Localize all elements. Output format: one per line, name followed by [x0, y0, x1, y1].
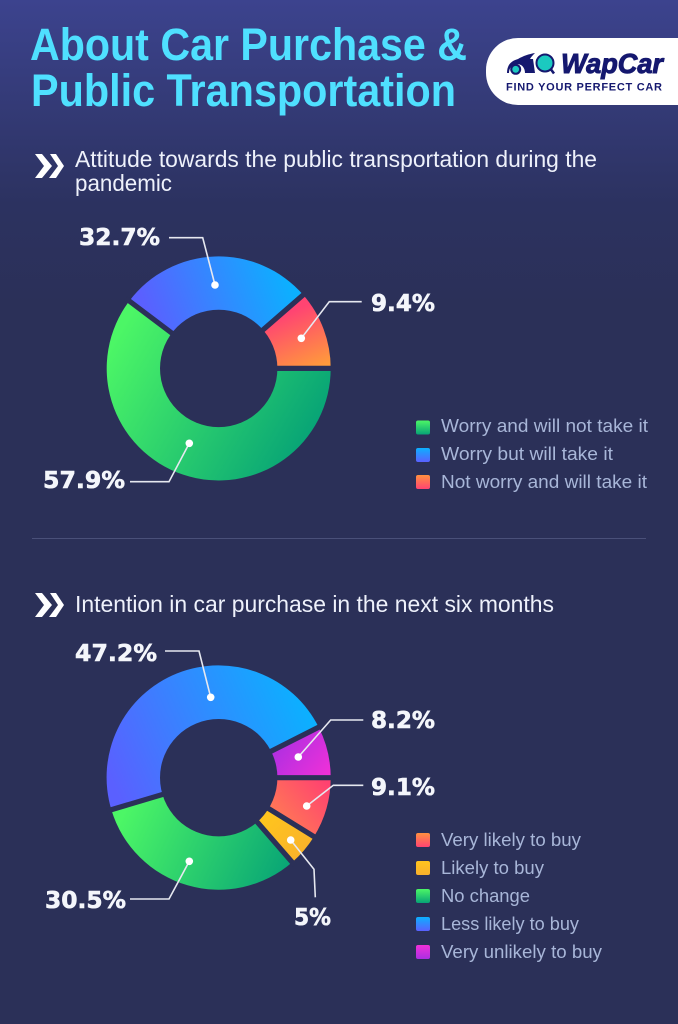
legend: intention: Less likely to buy — [441, 913, 580, 934]
logo badge — [486, 38, 678, 105]
callout: 47.2%: 47.2% — [75, 641, 157, 667]
icon: double chevron — [35, 154, 64, 178]
callout: 9.4% — [298, 291, 435, 342]
callout: 8.2%: 8.2% — [371, 708, 435, 734]
icon: double chevron — [35, 593, 64, 617]
legend: intention — [416, 829, 603, 962]
callout: 8.2% — [294, 708, 435, 761]
logo badge: FIND YOUR PERFECT CAR — [506, 82, 662, 94]
donut chart: intention — [107, 665, 336, 890]
legend: attitude: Worry and will not take it — [441, 415, 648, 436]
heading: intention: Intention in car purchase in the next six months — [75, 591, 554, 617]
legend: intention: No change — [441, 885, 530, 906]
title: Public Transportation — [31, 65, 456, 116]
callout: 9.1% — [303, 775, 435, 810]
legend: intention: Very unlikely to buy — [441, 941, 603, 962]
title — [30, 19, 467, 116]
icon: car with magnifier — [507, 53, 554, 75]
logo badge: WapCar — [561, 48, 665, 79]
heading: attitude — [35, 146, 597, 196]
legend: attitude: Worry but will take it — [441, 443, 613, 464]
heading: attitude: pandemic — [75, 170, 172, 196]
legend: intention: Likely to buy — [441, 857, 545, 878]
callout: 30.5%: 30.5% — [45, 888, 126, 914]
heading: attitude: Attitude towards the public transportation during the — [75, 146, 597, 172]
legend: intention: Very likely to buy — [441, 829, 582, 850]
callout: 57.9% — [43, 440, 193, 494]
callout: 9.1%: 9.1% — [371, 775, 435, 801]
callout: 9.4%: 9.4% — [371, 291, 435, 317]
callout: 32.7%: 32.7% — [79, 225, 160, 251]
legend: attitude — [416, 415, 648, 492]
legend: attitude: Not worry and will take it — [441, 471, 647, 492]
callout: 30.5% — [45, 858, 193, 914]
callout: 5%: 5% — [294, 905, 331, 931]
donut chart: attitude — [107, 256, 336, 480]
callout: 5% — [287, 836, 331, 931]
callout: 47.2% — [75, 641, 214, 701]
callout: 57.9%: 57.9% — [43, 468, 125, 494]
callout: 32.7% — [79, 225, 219, 289]
title: About Car Purchase & — [30, 19, 467, 70]
